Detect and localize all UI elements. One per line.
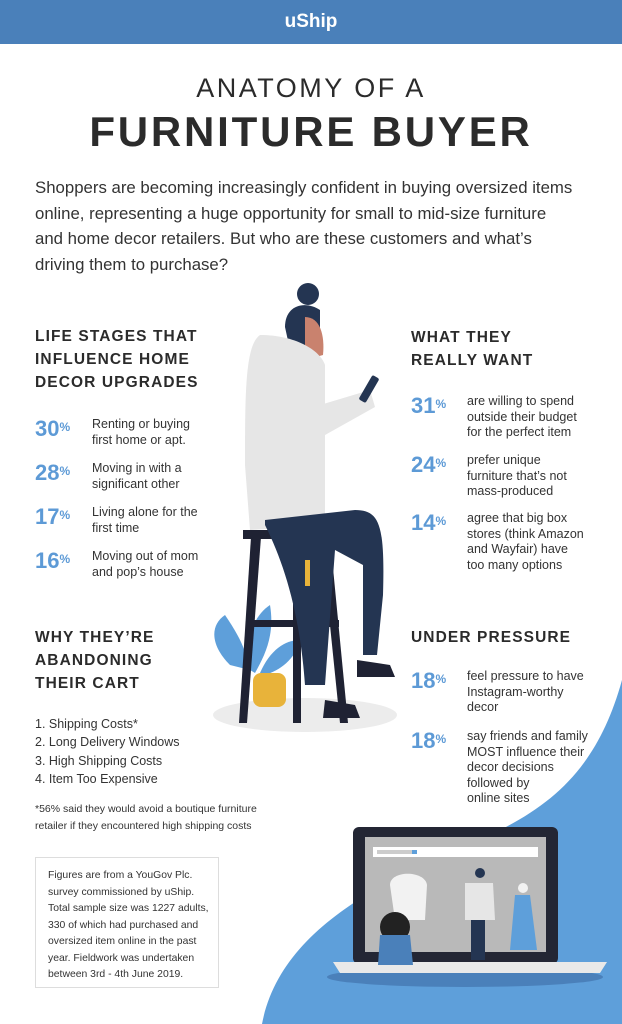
source box: oversized item online in the past [48,936,196,947]
stat 31%: for the perfect item [467,425,571,439]
stat 18% friends: 18% [411,728,446,753]
stat 24%: furniture that’s not [467,468,567,482]
stat 24%: 24% [411,452,446,477]
stat 24% [411,452,567,498]
intro paragraph [35,178,572,274]
intro paragraph: and home decor retailers. But who are these customers and what’s [35,229,532,248]
heading: what they really want [411,329,533,369]
heading: what they really want: WHAT THEY [411,329,512,346]
title: ANATOMY OF A [196,73,426,103]
source box: Figures are from a YouGov Plc. [48,870,192,881]
heading: life stages: INFLUENCE HOME [35,351,190,368]
stat 17% [35,504,198,534]
stat 31%: outside their budget [467,410,577,424]
list: reasons: 3. High Shipping Costs [35,754,162,768]
stat 30%: first home or apt. [92,432,186,446]
footnote: retailer if they encountered high shipping costs [35,820,252,832]
source box: 330 of which had purchased and [48,920,198,930]
stat 30% [35,416,190,446]
heading: abandoning cart [35,629,154,692]
heading: life stages: DECOR UPGRADES [35,374,199,391]
list: reasons: 2. Long Delivery Windows [35,735,180,749]
logo: uShip [285,11,337,32]
stat 28%: Moving in with a [92,461,182,475]
stat 14%: too many options [467,558,562,572]
illustration: woman on stool [213,283,397,732]
list: reasons: 1. Shipping Costs* [35,717,138,731]
stat 18% instagram: 18% [411,668,446,693]
stat 18% instagram: feel pressure to have [467,669,584,683]
stat 16%: 16% [35,548,70,573]
stat 28% [35,460,182,490]
stat 18% friends: MOST influence their [467,744,584,758]
title: FURNITURE BUYER [89,108,533,155]
list: reasons [35,717,180,786]
stat 28%: 28% [35,460,70,485]
source box: survey commissioned by uShip. [48,886,194,898]
source box: Total sample size was 1227 adults, [48,903,209,914]
heading: life stages: LIFE STAGES THAT [35,328,198,345]
heading: abandoning cart: THEIR CART [35,675,140,692]
stat 31%: 31% [411,393,446,418]
stat 17%: Living alone for the [92,505,198,519]
heading: abandoning cart: ABANDONING [35,652,153,669]
stat 14%: 14% [411,510,446,535]
stat 18% friends [411,728,588,805]
title [89,73,533,155]
stat 14%: agree that big box [467,511,567,525]
footnote: *56% said they would avoid a boutique furniture [35,803,257,815]
stat 14%: stores (think Amazon [467,526,584,540]
stat 18% instagram: Instagram-worthy [467,684,564,698]
heading: life stages [35,328,199,391]
stat 18% friends: say friends and family [467,729,588,743]
stat 24%: prefer unique [467,453,541,467]
intro paragraph: Shoppers are becoming increasingly confident in buying oversized items [35,178,572,197]
stat 14%: and Wayfair) have [467,542,568,556]
header bar [0,0,622,44]
illustration: laptop with shoppers [327,827,607,987]
stat 16% [35,548,198,578]
source box: between 3rd - 4th June 2019. [48,969,183,980]
intro paragraph: online, representing a huge opportunity for small to mid-size furniture [35,204,546,223]
stat 18% instagram [411,668,584,714]
heading: abandoning cart: WHY THEY’RE [35,629,154,646]
heading: under pressure: UNDER PRESSURE [411,629,571,646]
stat 28%: significant other [92,476,180,490]
stat 31%: are willing to spend [467,394,574,408]
stat 31% [411,393,577,439]
source box: year. Fieldwork was undertaken [48,952,194,964]
stat 16%: and pop’s house [92,564,184,578]
intro paragraph: driving them to purchase? [35,255,228,274]
stat 17%: first time [92,520,139,534]
stat 18% friends: online sites [467,791,530,805]
stat 16%: Moving out of mom [92,549,198,563]
stat 18% friends: decor decisions [467,760,554,774]
stat 24%: mass-produced [467,484,553,498]
list: reasons: 4. Item Too Expensive [35,772,158,786]
stat 30%: Renting or buying [92,417,190,431]
stat 18% friends: followed by [467,776,530,790]
source box [35,857,219,988]
stat 18% instagram: decor [467,700,498,714]
footnote [35,803,257,832]
stat 17%: 17% [35,504,70,529]
stat 14% [411,510,584,572]
stat 30%: 30% [35,416,70,441]
heading: what they really want: REALLY WANT [411,352,533,369]
